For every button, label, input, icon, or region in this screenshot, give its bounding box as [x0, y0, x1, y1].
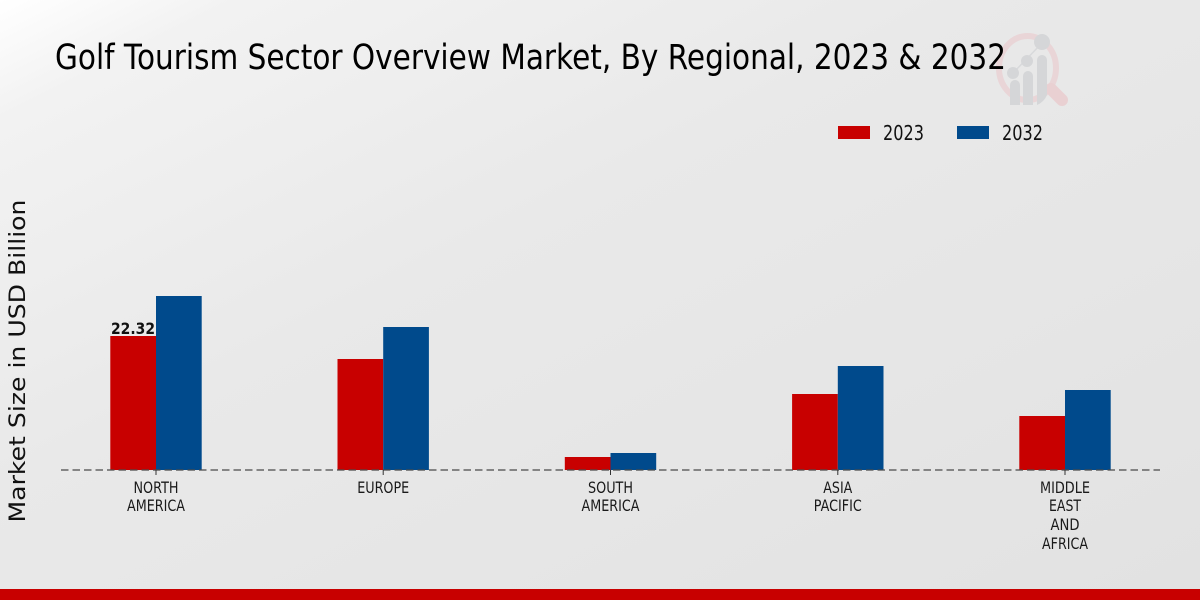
label: Middle East and Africa: MIDDLE — [1040, 478, 1090, 497]
legend item: 2023 — [838, 121, 924, 145]
tick marks — [156, 470, 1065, 475]
label: Middle East and Africa: AND — [1050, 515, 1080, 534]
bars: Middle East and Africa — [1019, 390, 1111, 470]
bars: North America — [110, 296, 202, 470]
x axis baseline — [61, 469, 1160, 471]
title: Golf Tourism Sector Overview Market, By Regional, 2023 & 2032 — [55, 38, 1006, 78]
label: Europe: EUROPE — [357, 478, 409, 497]
label: Asia Pacific: ASIA — [823, 478, 852, 497]
data label: 22.32: 22.32 — [111, 319, 155, 338]
icon: magnifier watermark logo — [999, 34, 1062, 105]
label: Middle East and Africa: EAST — [1049, 496, 1081, 515]
footer bar — [0, 589, 1200, 600]
legend item: 2023: 2023 — [883, 121, 924, 145]
y axis label: Market Size in USD Billion — [5, 200, 31, 522]
label: South America: AMERICA — [582, 496, 640, 515]
bars: Europe — [338, 327, 429, 470]
bars: South America — [565, 453, 656, 470]
legend — [838, 121, 1043, 145]
label: Asia Pacific: PACIFIC — [814, 496, 862, 515]
label: South America: SOUTH — [588, 478, 633, 497]
bar chart — [61, 296, 1160, 553]
category labels — [127, 478, 1090, 553]
label: North America: AMERICA — [127, 496, 185, 515]
legend item: 2032: 2032 — [1002, 121, 1043, 145]
legend item: 2032 — [957, 121, 1043, 145]
label: Middle East and Africa: AFRICA — [1042, 534, 1088, 553]
bars: Asia Pacific — [792, 366, 884, 470]
label: North America: NORTH — [134, 478, 178, 497]
